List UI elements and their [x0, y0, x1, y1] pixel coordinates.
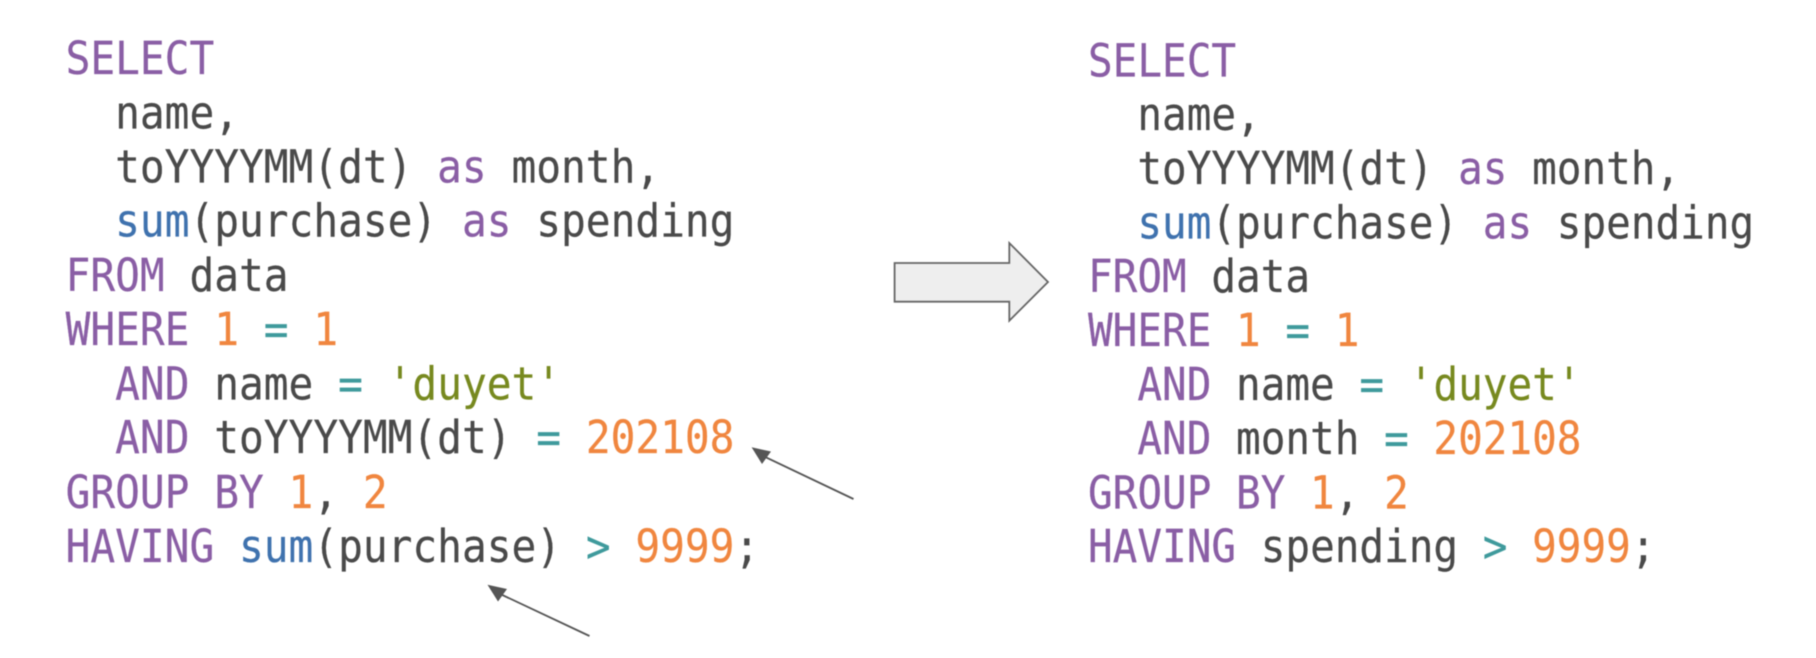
panel: rewritten query using aliases	[1088, 36, 1754, 574]
code line: SELECT: SELECT	[1088, 36, 1236, 88]
panel: original query with repeated expressions	[66, 33, 759, 573]
arrow: points at sum(purchase)	[488, 585, 590, 636]
code line: sum as spending: sum(purchase) as spending	[1088, 198, 1754, 250]
code line: GROUP BY: GROUP BY 1, 2	[1088, 468, 1409, 520]
code line: toYYYYMM as month: toYYYYMM(dt) as month,	[1088, 143, 1680, 196]
code line: name: name,	[66, 88, 239, 140]
code line: name: name,	[1088, 89, 1261, 142]
code line: HAVING sum: HAVING sum(purchase) > 9999;	[66, 521, 759, 573]
arrow: points at 202108 line	[752, 447, 854, 499]
code line: toYYYYMM as month: toYYYYMM(dt) as month,	[66, 142, 660, 194]
code line: HAVING spending: HAVING spending > 9999;	[1088, 521, 1655, 574]
code line: sum as spending: sum(purchase) as spending	[66, 196, 734, 248]
code line: SELECT: SELECT	[66, 33, 214, 85]
code line: FROM data: FROM data	[66, 250, 289, 302]
code line: AND toYYYYMM: AND toYYYYMM(dt) = 202108	[66, 412, 734, 464]
code line: WHERE 1 = 1: WHERE 1 = 1	[1088, 305, 1359, 358]
code line: WHERE 1 = 1: WHERE 1 = 1	[66, 304, 338, 356]
code line: AND name: AND name = 'duyet'	[66, 359, 561, 411]
arrow: large transformation arrow	[895, 243, 1048, 321]
code line: AND name: AND name = 'duyet'	[1088, 359, 1581, 412]
code line: GROUP BY: GROUP BY 1, 2	[66, 467, 388, 519]
code line: AND month: AND month = 202108	[1088, 413, 1581, 466]
code line: FROM data: FROM data	[1088, 251, 1310, 304]
